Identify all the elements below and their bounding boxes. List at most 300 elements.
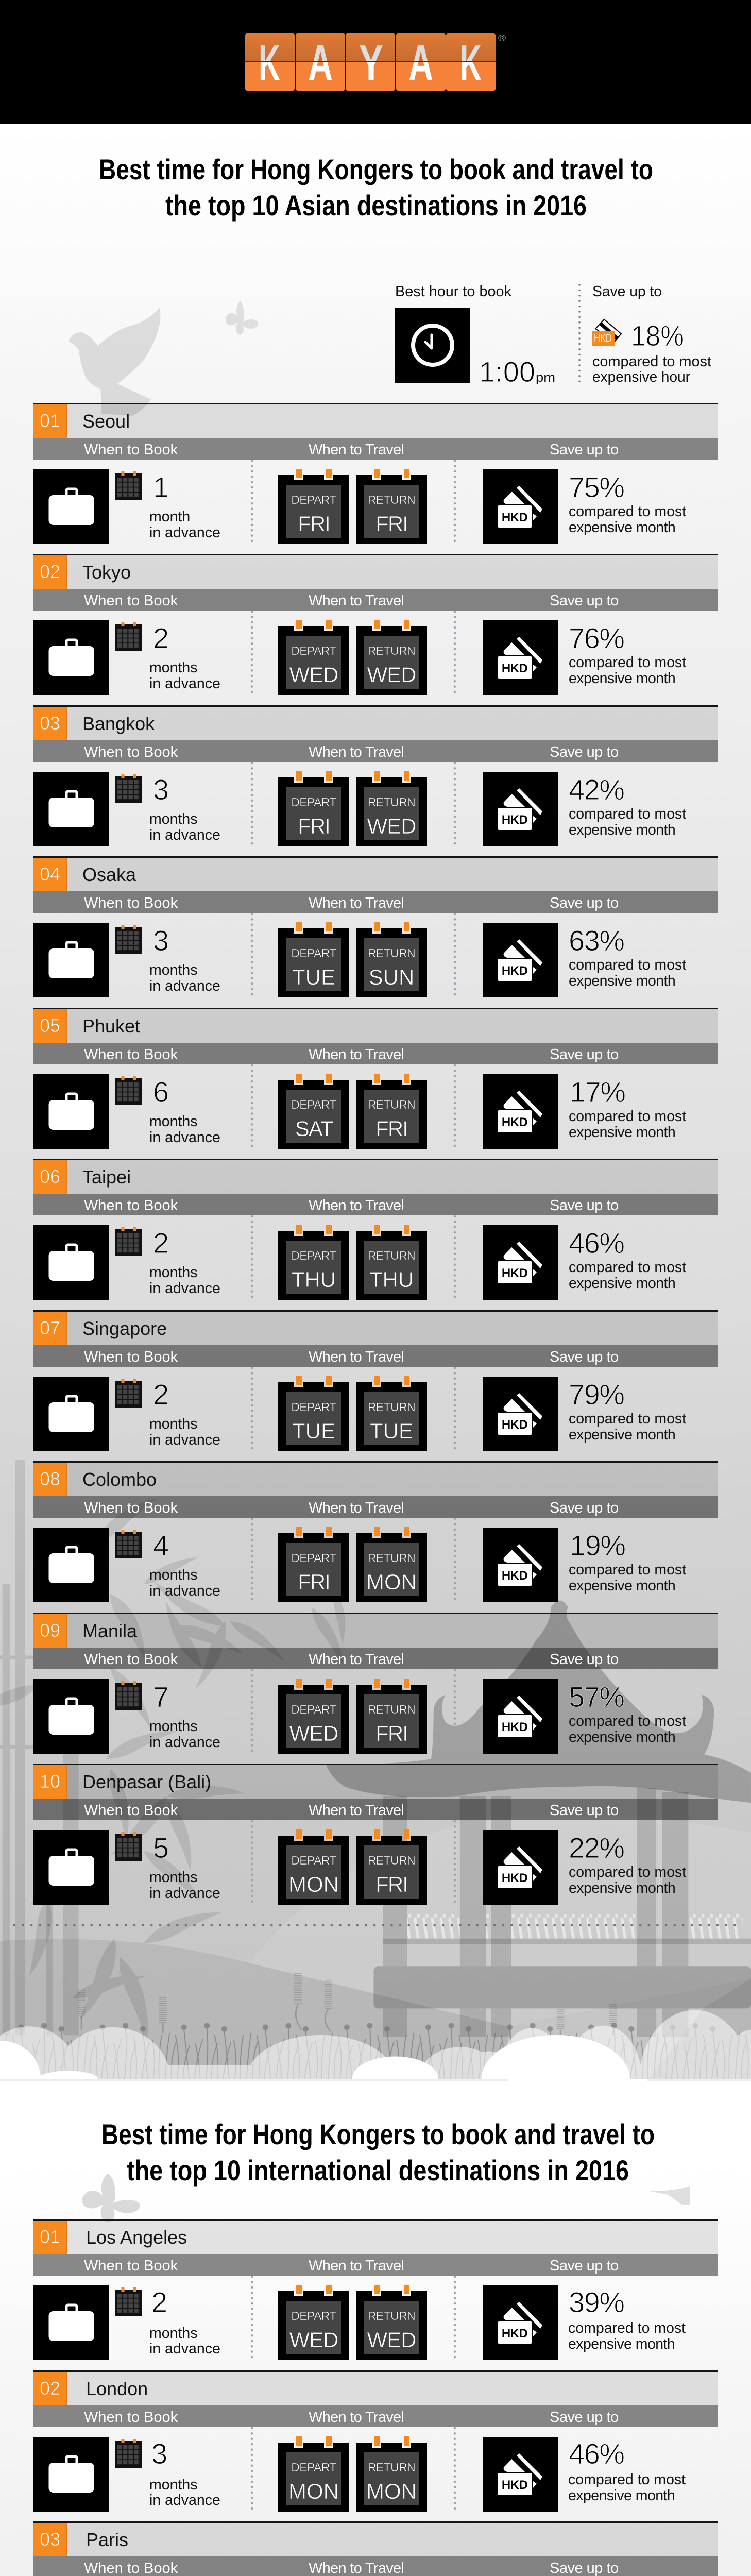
saving: 46% (569, 1227, 624, 1259)
city: Bangkok (82, 713, 155, 734)
icon: HKD note: HKD (502, 1871, 527, 1885)
return card (356, 2285, 427, 2360)
months in advance: months (149, 1113, 197, 1130)
depart card (278, 2285, 349, 2360)
months in advance: month (149, 509, 190, 525)
return card: RETURN (368, 1703, 415, 1716)
months in advance: months (149, 2325, 197, 2342)
depart card: WED (289, 1721, 338, 1745)
saving: expensive month (569, 822, 675, 838)
depart card (278, 1225, 349, 1300)
rank: 10 (40, 1771, 60, 1792)
saving: compared to most (568, 2320, 686, 2336)
city: London (86, 2378, 148, 2399)
row: 03 Bangkok (33, 705, 718, 846)
return card (356, 2436, 427, 2512)
return card: RETURN (368, 493, 415, 506)
depart card: FRI (298, 814, 330, 838)
rank: 02 (40, 561, 60, 582)
return card: RETURN (368, 795, 415, 809)
depart card (278, 620, 349, 695)
row: 02 Tokyo (33, 554, 718, 695)
title: international destinations: the top 10 international destinations in 2016 (127, 2154, 629, 2187)
depart card: WED (289, 2328, 338, 2352)
row: 04 Osaka (33, 856, 718, 997)
city: Denpasar (Bali) (82, 1771, 211, 1792)
column headings: When to Book (84, 1197, 178, 1214)
saving: compared to most (569, 1864, 686, 1880)
column headings: Save up to (550, 1651, 619, 1668)
months in advance: in advance (149, 827, 220, 843)
depart card: TUE (292, 965, 335, 989)
saving: expensive month (569, 1729, 675, 1745)
rank: 04 (40, 863, 60, 885)
saving: expensive month (568, 2487, 675, 2504)
depart card: DEPART (291, 795, 336, 809)
return card: MON (366, 2479, 417, 2503)
column headings: When to Travel (309, 442, 404, 458)
column headings (84, 2258, 619, 2274)
row: 09 Manila (33, 1613, 718, 1754)
icon: HKD note (483, 772, 558, 846)
months in advance: months (149, 1869, 197, 1886)
hills (0, 1815, 751, 2081)
icon: HKD note: HKD (502, 2327, 527, 2341)
months in advance: 3 (153, 773, 169, 806)
depart card: DEPART (291, 2461, 336, 2474)
panel: best hour to book (395, 283, 555, 388)
months in advance: 3 (153, 924, 169, 957)
months in advance: in advance (149, 1432, 220, 1448)
logo: KAYAK: K (460, 35, 482, 91)
rank: 08 (40, 1468, 60, 1489)
saving (569, 1832, 686, 1896)
saving (569, 924, 686, 989)
icon: HKD note (483, 1679, 558, 1754)
depart card (278, 1527, 349, 1602)
depart card: DEPART (291, 1400, 336, 1414)
city: Manila (82, 1620, 138, 1641)
illustration: grass and clouds (0, 1973, 751, 2079)
logo: KAYAK: Y (359, 35, 383, 91)
depart card: DEPART (291, 1703, 336, 1716)
city: Phuket (82, 1015, 140, 1037)
saving: 63% (569, 924, 624, 957)
return card: SUN (369, 965, 414, 989)
return card: THU (369, 1267, 414, 1292)
depart card: DEPART (291, 493, 336, 506)
saving (569, 1227, 686, 1292)
column headings (84, 442, 619, 458)
divider: best hour (578, 285, 581, 382)
saving (569, 1681, 686, 1745)
row: 05 Phuket (33, 1008, 718, 1149)
months in advance: in advance (149, 1734, 220, 1751)
column headings: When to Book (84, 1651, 178, 1668)
column headings (84, 2409, 619, 2426)
city: Singapore (82, 1318, 167, 1339)
column headings (84, 744, 619, 760)
icon: HKD note (483, 1377, 558, 1451)
logo: KAYAK: K (259, 35, 280, 91)
saving (569, 1529, 686, 1594)
saving: expensive month (569, 1427, 675, 1443)
column headings (84, 1500, 619, 1516)
logo: KAYAK: ® (498, 33, 506, 43)
city: Paris (86, 2529, 128, 2550)
months in advance (149, 1832, 220, 1902)
column headings (84, 1349, 619, 1365)
row: 01 Seoul (33, 403, 718, 544)
return card (356, 620, 427, 695)
saving: compared to most (569, 957, 686, 973)
icon: suitcase (33, 1679, 109, 1754)
return card (356, 469, 427, 544)
depart card: THU (292, 1267, 336, 1292)
rank: 01 (40, 2226, 60, 2247)
icon: calendar (115, 1227, 142, 1256)
depart card (278, 922, 349, 997)
column headings: When to Book (84, 744, 178, 760)
months in advance: in advance (149, 1280, 220, 1297)
icon: HKD note (483, 2437, 558, 2512)
months in advance (149, 622, 220, 692)
saving: expensive month (569, 1124, 675, 1141)
icon: calendar (115, 2439, 142, 2468)
saving: compared to most (569, 1108, 686, 1125)
months in advance (149, 2437, 220, 2509)
saving: compared to most (569, 806, 686, 822)
saving (568, 2437, 686, 2504)
column headings: When to Book (84, 1349, 178, 1365)
saving value: 18% (631, 319, 684, 352)
saving: 39% (569, 2286, 624, 2318)
saving: expensive month (569, 670, 675, 687)
months in advance: in advance (149, 1885, 220, 1902)
months in advance: 2 (153, 1227, 169, 1259)
depart card: DEPART (291, 2309, 336, 2323)
return card: FRI (376, 1116, 407, 1141)
months in advance (149, 924, 220, 994)
depart card: FRI (298, 512, 330, 536)
return card: RETURN (368, 2309, 415, 2323)
saving value (592, 319, 711, 385)
rank: 03 (40, 2529, 60, 2550)
icon: HKD note: HKD (502, 1266, 527, 1280)
column headings: When to Travel (309, 1500, 404, 1516)
city: Colombo (82, 1469, 157, 1490)
icon: suitcase (33, 469, 109, 544)
depart card (278, 1376, 349, 1451)
depart card: SAT (295, 1116, 333, 1141)
months in advance (149, 1681, 220, 1751)
column headings: When to Travel (309, 592, 404, 609)
icon: suitcase (33, 1074, 109, 1149)
white clouds (0, 2035, 630, 2079)
logo: KAYAK (245, 33, 506, 91)
saving: 42% (569, 773, 624, 806)
months in advance: months (149, 962, 197, 978)
column headings: Save up to (550, 1500, 619, 1516)
column headings (84, 2560, 619, 2576)
illustration: bird tail (646, 2186, 690, 2205)
column headings: When to Book (84, 442, 178, 458)
icon: calendar (115, 1530, 142, 1558)
saving value: expensive hour (592, 369, 690, 385)
illustration: butterfly two (82, 2173, 140, 2222)
column headings: When to Book (84, 592, 178, 609)
city: Osaka (82, 864, 136, 885)
icon: calendar (115, 925, 142, 954)
column headings: When to Travel (309, 744, 404, 760)
rank: 06 (40, 1166, 60, 1187)
icon: HKD note: HKD (502, 1720, 527, 1734)
icon: HKD note (483, 1074, 558, 1149)
column headings: Save up to (550, 592, 619, 609)
saving: 79% (569, 1378, 624, 1411)
best hour value: 1:00 (479, 355, 535, 388)
icon: HKD note (483, 620, 558, 695)
depart card (278, 1829, 349, 1905)
icon: suitcase (33, 1830, 109, 1905)
months in advance (149, 1227, 220, 1297)
row: 08 Colombo (33, 1461, 718, 1602)
bamboo leaves (0, 1490, 352, 2042)
depart card (278, 1074, 349, 1149)
row: 01 Los Angeles (33, 2219, 718, 2360)
return card: RETURN (368, 2461, 415, 2474)
icon: HKD note: HKD (502, 662, 527, 675)
icon: HKD note: HKD (502, 964, 527, 978)
pagoda (326, 1600, 751, 2037)
page background: section two (0, 2079, 751, 2576)
pagoda lattice (407, 1914, 743, 1939)
months in advance (149, 1378, 220, 1448)
months in advance: 7 (153, 1681, 169, 1713)
column headings (84, 1651, 619, 1668)
depart card: DEPART (291, 644, 336, 657)
months in advance: months (149, 811, 197, 827)
dotted divider (14, 1924, 740, 1926)
icon: calendar (115, 1681, 142, 1710)
saving (568, 2286, 686, 2352)
icon: HKD note: HKD (502, 511, 527, 524)
column headings: When to Book (84, 895, 178, 911)
return card: WED (367, 814, 416, 838)
depart card (278, 771, 349, 846)
return card (356, 1074, 427, 1149)
return card: RETURN (368, 644, 415, 657)
months in advance: 5 (153, 1832, 169, 1864)
header band (0, 0, 751, 124)
column headings: When to Travel (309, 1802, 404, 1819)
saving (569, 773, 686, 838)
months in advance: in advance (149, 2341, 220, 2357)
icon: HKD note: HKD (502, 2478, 527, 2492)
icon: clock (395, 308, 470, 383)
saving: compared to most (569, 1562, 686, 1578)
row: 10 Denpasar (Bali) (33, 1764, 718, 1905)
depart card: DEPART (291, 1854, 336, 1867)
depart card (278, 2436, 349, 2512)
return card: TUE (370, 1419, 413, 1443)
column headings: When to Travel (309, 1651, 404, 1668)
row: 03 Paris (33, 2521, 718, 2576)
column headings (84, 1046, 619, 1063)
translucent clouds (0, 2010, 751, 2079)
months in advance: in advance (149, 1583, 220, 1599)
icon: HKD note (483, 923, 558, 997)
title: Asian destinations: the top 10 Asian destinations in 2016 (165, 189, 587, 222)
icon: HKD note (483, 2285, 558, 2360)
column headings: When to Book (84, 1046, 178, 1063)
illustration: dove (69, 308, 160, 416)
saving: compared to most (569, 1259, 686, 1276)
rank: 09 (40, 1620, 60, 1641)
return card: FRI (376, 1872, 407, 1896)
depart card: DEPART (291, 1249, 336, 1262)
months in advance: 1 (153, 471, 169, 503)
saving value: compared to most (592, 353, 711, 370)
saving: 17% (570, 1076, 625, 1108)
depart card (278, 1679, 349, 1754)
depart card: FRI (298, 1570, 330, 1594)
saving: compared to most (569, 1411, 686, 1427)
icon: suitcase (33, 772, 109, 846)
column headings: Save up to (550, 2258, 619, 2274)
saving: 19% (570, 1529, 625, 1562)
rank: 02 (40, 2378, 60, 2399)
months in advance: 2 (153, 622, 169, 654)
return card: MON (366, 1570, 417, 1594)
months in advance: 4 (153, 1529, 169, 1562)
depart card: DEPART (291, 1551, 336, 1565)
months in advance: months (149, 1264, 197, 1281)
icon: suitcase (33, 1225, 109, 1300)
saving (569, 1076, 686, 1141)
saving: 75% (569, 471, 624, 503)
page background: section one (0, 124, 751, 2079)
saving: compared to most (569, 654, 686, 671)
months in advance: 2 (151, 2286, 167, 2318)
return card: RETURN (368, 1854, 415, 1867)
rank: 07 (40, 1317, 60, 1338)
return card (356, 771, 427, 846)
column headings: Save up to (550, 744, 619, 760)
city: Seoul (82, 411, 130, 432)
icon: calendar (115, 1379, 142, 1408)
saving (569, 1378, 686, 1443)
icon: suitcase (33, 923, 109, 997)
icon: orange HKD note (592, 319, 621, 346)
column headings: Save up to (550, 1197, 619, 1214)
months in advance: in advance (149, 2492, 220, 2509)
months in advance: 6 (153, 1076, 169, 1108)
saving: compared to most (569, 1713, 686, 1730)
panel: save up to per hour (592, 283, 711, 385)
months in advance (149, 2286, 220, 2357)
saving: 46% (569, 2437, 624, 2470)
column headings: When to Travel (309, 1349, 404, 1365)
column headings: When to Travel (309, 1197, 404, 1214)
return card: WED (367, 2328, 416, 2352)
logo: KAYAK: A (308, 35, 333, 91)
icon: orange HKD note: HKD (594, 333, 612, 344)
icon: calendar (115, 2287, 142, 2316)
return card (356, 1679, 427, 1754)
return card: RETURN (368, 1098, 415, 1111)
column headings: Save up to (550, 2409, 619, 2426)
icon: suitcase (33, 2437, 109, 2512)
icon: HKD note: HKD (502, 1418, 527, 1432)
icon: HKD note (483, 1830, 558, 1905)
return card: RETURN (368, 946, 415, 960)
depart card: WED (289, 663, 338, 687)
saving: compared to most (568, 2471, 686, 2488)
row: 06 Taipei (33, 1159, 718, 1300)
return card: FRI (376, 512, 407, 536)
icon: calendar (115, 1076, 142, 1105)
saving: expensive month (569, 1880, 675, 1896)
depart card: TUE (292, 1419, 335, 1443)
icon: HKD note (483, 1225, 558, 1300)
city: Los Angeles (86, 2227, 187, 2248)
city: Taipei (82, 1166, 131, 1188)
column headings: When to Book (84, 1802, 178, 1819)
months in advance (149, 1076, 220, 1146)
return card (356, 1829, 427, 1905)
icon: HKD note: HKD (502, 1569, 527, 1583)
depart card: DEPART (291, 946, 336, 960)
bamboo stalks (0, 1460, 81, 2035)
months in advance (149, 471, 220, 541)
grass (0, 2023, 751, 2079)
column headings: Save up to (550, 1349, 619, 1365)
column headings: When to Travel (309, 895, 404, 911)
label: best hour: Best hour to book (395, 283, 512, 300)
months in advance: 3 (151, 2437, 167, 2470)
months in advance: months (149, 659, 197, 676)
icon: suitcase (33, 1528, 109, 1602)
months in advance: months (149, 1567, 197, 1583)
return card (356, 922, 427, 997)
months in advance: 2 (153, 1378, 169, 1411)
column headings: When to Travel (309, 2409, 404, 2426)
months in advance: months (149, 1416, 197, 1432)
depart card (278, 469, 349, 544)
column headings: Save up to (550, 442, 619, 458)
saving: expensive month (569, 1578, 675, 1594)
icon: HKD note (483, 469, 558, 544)
saving: 22% (569, 1832, 624, 1864)
return card: RETURN (368, 1400, 415, 1414)
months in advance (149, 773, 220, 843)
rank: 01 (40, 410, 60, 431)
illustration: butterfly (226, 301, 258, 335)
title: international destinations (101, 2118, 655, 2187)
icon: calendar (115, 774, 142, 803)
icon: suitcase (33, 620, 109, 695)
column headings (84, 592, 619, 609)
months in advance: in advance (149, 1129, 220, 1146)
label: save up to: Save up to (592, 283, 662, 300)
return card (356, 1376, 427, 1451)
icon: suitcase (33, 2285, 109, 2360)
icon: calendar (115, 1832, 142, 1861)
rank: 05 (40, 1015, 60, 1036)
wheat stalks (81, 1973, 613, 2035)
column headings (84, 895, 619, 911)
